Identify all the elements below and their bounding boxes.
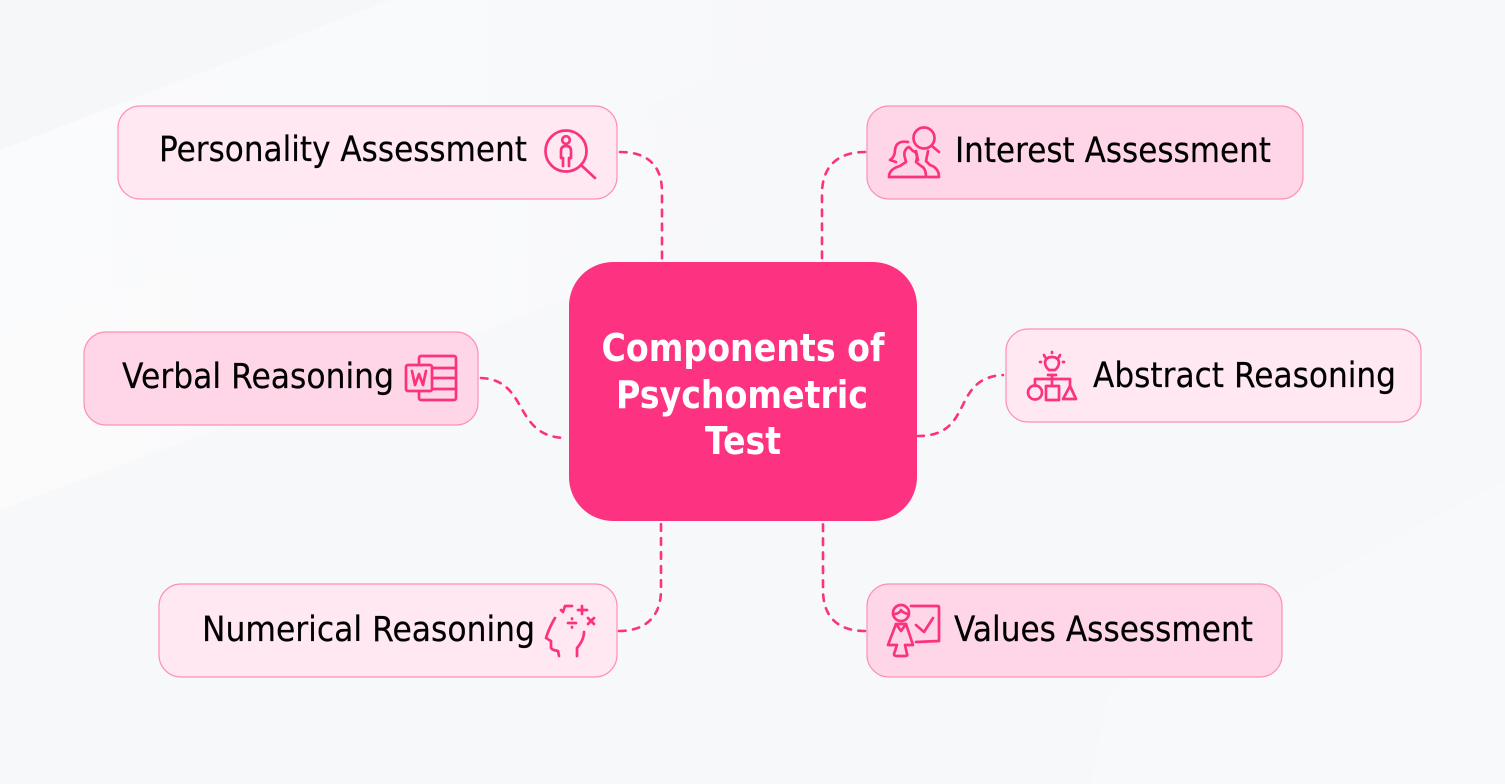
icon: lightbulb and shapes [1028, 352, 1076, 400]
panel: values assessment [867, 584, 1282, 677]
panel: verbal reasoning [84, 332, 478, 425]
panel: central title [569, 262, 917, 521]
connector: numerical to centre [619, 521, 661, 631]
connector: personality to centre [620, 152, 662, 262]
connector: verbal to centre [481, 378, 567, 438]
panel: interest assessment [867, 106, 1303, 199]
connector: abstract to centre [918, 375, 1003, 436]
label: abstract reasoning: Abstract Reasoning [1093, 356, 1396, 396]
icon: person with checked board [888, 605, 939, 656]
panel: numerical reasoning [159, 584, 617, 677]
label: numerical reasoning: Numerical Reasoning [202, 610, 535, 650]
icon: people with magnifier [889, 128, 939, 177]
label: interest assessment: Interest Assessment [955, 131, 1271, 171]
panel: personality assessment [118, 106, 617, 199]
label: values assessment: Values Assessment [954, 610, 1253, 650]
icon: word document [406, 356, 456, 400]
connector: interest to centre [822, 152, 865, 262]
title: Test [705, 419, 781, 463]
label: verbal reasoning: Verbal Reasoning [122, 357, 394, 397]
icon: person under magnifier [546, 130, 595, 178]
title: Psychometric [616, 373, 868, 417]
connector: values to centre [823, 521, 865, 631]
label: personality assessment: Personality Assessment [159, 130, 527, 170]
title: Components of [602, 326, 885, 370]
icon: head with math symbols [546, 606, 594, 656]
panel: abstract reasoning [1006, 329, 1421, 422]
